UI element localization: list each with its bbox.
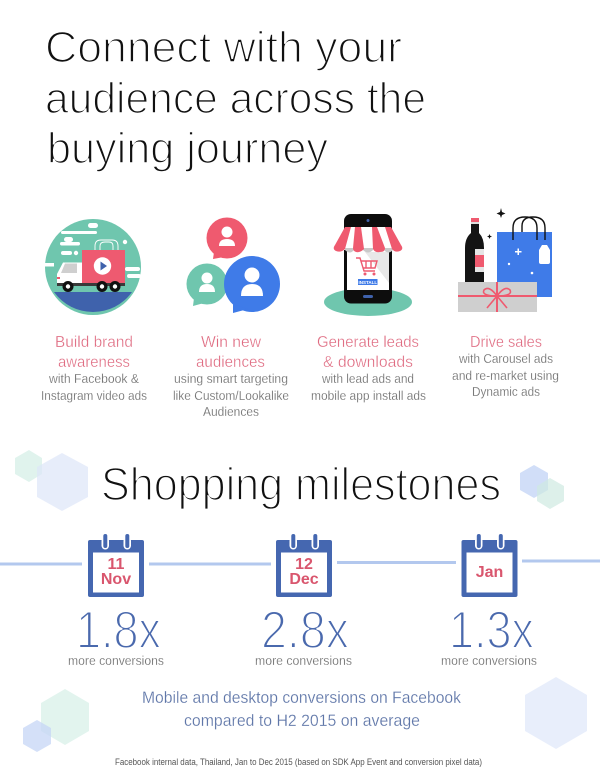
install button: INSTALL	[358, 280, 377, 285]
blue chat bubble	[224, 256, 280, 313]
icon: delivery truck with shopping bag	[45, 219, 141, 315]
column 2 text: win new audiences	[173, 334, 289, 419]
column 4 text: drive sales: Dynamic ads	[472, 385, 540, 399]
column 2 text: win new audiences: using smart targeting	[174, 372, 288, 386]
awning	[334, 227, 402, 252]
shopping bag	[497, 217, 552, 297]
gift box	[458, 282, 537, 312]
wine bottle	[465, 218, 484, 282]
red chat bubble	[206, 218, 248, 259]
column 3 text: generate leads and downloads: with lead ads and	[321, 372, 414, 386]
icon: calendar 11 Nov: Nov	[101, 571, 131, 588]
source note: Facebook internal data, Thailand, Jan to Dec 2015 (based on SDK App Event and conversion pixel data)	[115, 757, 482, 767]
summary text	[142, 689, 462, 730]
column 4 text: drive sales: and re-market using	[452, 369, 559, 383]
caption: more conversions: more conversions	[255, 654, 352, 668]
column 2 text: win new audiences: like Custom/Lookalike	[173, 389, 289, 403]
column 2 text: win new audiences: audiences	[196, 354, 265, 371]
icon: calendar 12 Dec: 12	[295, 556, 313, 573]
summary text: Mobile and desktop conversions on Facebook	[142, 689, 462, 707]
milestone: December	[255, 534, 352, 668]
timeline line	[0, 560, 600, 566]
column 1 text: build brand awareness	[41, 334, 147, 403]
icon: phone storefront	[324, 214, 412, 316]
icon: shopping cart	[356, 258, 377, 271]
stat: 1.3x: 1.3x	[449, 601, 534, 660]
milestone: January	[441, 534, 537, 668]
column 4 text: drive sales: Drive sales	[470, 334, 542, 351]
column 1 text: build brand awareness: with Facebook &	[48, 372, 140, 386]
icon: calendar 12 Dec	[276, 534, 332, 597]
column 3 text: generate leads and downloads: & downloads	[323, 354, 413, 371]
icon: audience chat bubbles	[186, 218, 280, 313]
stat: 2.8x: 2.8x	[261, 601, 349, 660]
column 3 text: generate leads and downloads	[311, 334, 426, 403]
icon: wine, shopping bag and gift	[458, 208, 552, 312]
icon: calendar 11 Nov	[88, 534, 144, 597]
hexagon: lower right	[525, 677, 587, 749]
column 1 text: build brand awareness: Instagram video ads	[41, 389, 147, 403]
column 4 text: drive sales: with Carousel ads	[458, 352, 553, 366]
green chat bubble	[186, 264, 228, 306]
column 3 text: generate leads and downloads: Generate leads	[317, 334, 419, 351]
icon: calendar 12 Dec: Dec	[289, 571, 319, 588]
column 1 text: build brand awareness: awareness	[58, 354, 130, 371]
column 2 text: win new audiences: Win new	[201, 334, 261, 351]
title: buying journey	[47, 124, 328, 173]
hexagons: upper left	[15, 450, 88, 511]
caption: more conversions: more conversions	[441, 654, 537, 668]
title	[45, 23, 426, 173]
column 3 text: generate leads and downloads: mobile app install ads	[311, 389, 426, 403]
hexagons: lower left	[23, 689, 89, 752]
column 4 text: drive sales	[452, 334, 559, 399]
caption: more conversions: more conversions	[68, 654, 164, 668]
milestone: November	[68, 534, 164, 668]
sparkles	[496, 208, 506, 218]
icon: calendar Jan: Jan	[476, 564, 503, 581]
title: Connect with your	[45, 23, 402, 72]
heading: shopping milestones: Shopping milestones	[101, 458, 501, 510]
stat: 1.8x: 1.8x	[76, 601, 161, 660]
hexagons: upper right	[520, 465, 564, 509]
column 1 text: build brand awareness: Build brand	[55, 334, 133, 351]
title: audience across the	[45, 74, 426, 123]
summary text: compared to H2 2015 on average	[184, 712, 420, 730]
column 2 text: win new audiences: Audiences	[203, 405, 259, 419]
icon: calendar 11 Nov: 11	[108, 556, 125, 573]
